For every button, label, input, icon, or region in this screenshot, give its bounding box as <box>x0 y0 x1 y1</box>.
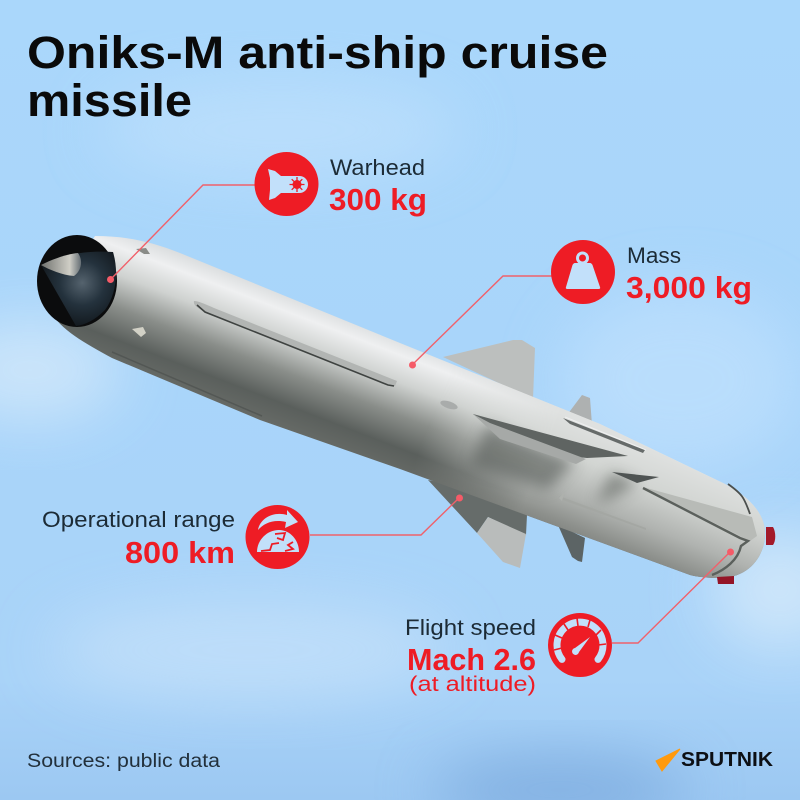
rear top fin <box>443 340 535 399</box>
callout: operational range <box>42 505 310 570</box>
rear small wing <box>612 472 659 483</box>
callout: mass <box>551 240 752 305</box>
top rail <box>563 418 645 453</box>
lower rear fin <box>558 525 585 562</box>
small fittings <box>136 248 150 254</box>
title: missile <box>27 75 192 126</box>
callout: flight speed <box>405 613 612 696</box>
side rail <box>559 496 646 530</box>
small rear top fin <box>567 395 592 425</box>
leader: mass <box>409 276 552 368</box>
icon: speedometer <box>548 613 612 677</box>
mid wing <box>473 414 628 458</box>
icon: warhead <box>254 152 318 216</box>
lower strake <box>112 352 262 416</box>
lower fin tip <box>477 517 526 568</box>
red bottom nozzle <box>717 576 734 584</box>
seeker cone highlight <box>41 253 81 276</box>
warhead label: Warhead <box>330 155 425 180</box>
mass label: Mass <box>627 243 681 268</box>
icon: weight <box>551 240 615 304</box>
flight speed note: (at altitude) <box>409 673 536 696</box>
title: Oniks-M anti-ship cruise <box>27 27 608 78</box>
flight speed value: Mach 2.6 <box>407 642 536 677</box>
red rear nozzle <box>766 527 775 545</box>
flight speed label: Flight speed <box>405 615 536 640</box>
warhead value: 300 kg <box>329 182 427 217</box>
black seeker nose <box>37 235 117 327</box>
logo: sputnik: SPUTNIK <box>681 749 774 771</box>
leader: warhead <box>107 185 256 283</box>
leader: flight speed <box>612 548 734 643</box>
long dorsal strake <box>194 301 397 386</box>
title <box>27 27 608 126</box>
missile body <box>50 236 765 578</box>
operational range value: 800 km <box>125 535 235 570</box>
rear body shading <box>432 392 765 578</box>
callout: warhead <box>254 152 427 217</box>
lower front fin <box>428 480 527 535</box>
rear fairing <box>643 487 757 541</box>
missile <box>37 235 800 590</box>
icon: range globe <box>246 505 310 569</box>
seeker glass <box>41 252 116 326</box>
mass value: 3,000 kg <box>626 270 752 305</box>
sources: Sources: public data <box>27 751 220 772</box>
leader: operational range <box>310 494 463 535</box>
operational range label: Operational range <box>42 507 235 532</box>
